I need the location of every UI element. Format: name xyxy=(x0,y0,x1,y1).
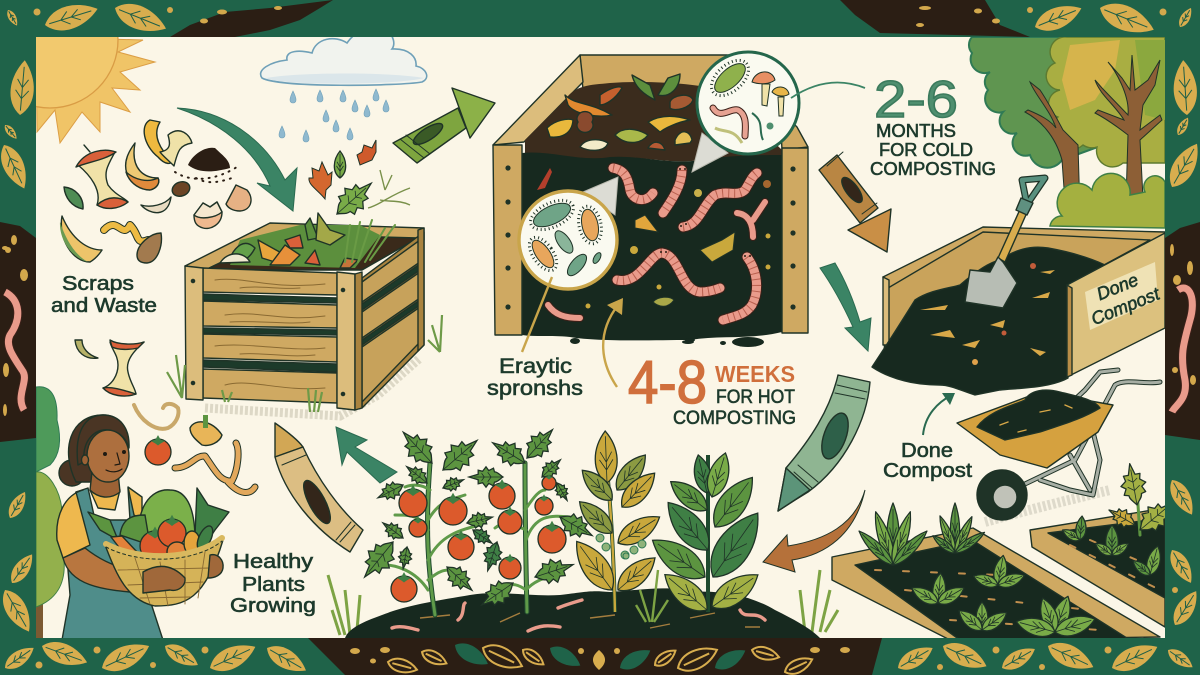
soil band: bottom xyxy=(308,638,882,675)
soil patch: left xyxy=(0,222,36,442)
small grass on mound xyxy=(636,570,668,622)
magnifier: upper microbes xyxy=(692,52,799,172)
worms xyxy=(548,168,765,320)
arrow: teal back to bin xyxy=(336,427,397,483)
callout: hot composting duration: FOR HOT xyxy=(716,387,795,408)
wooden sign panel xyxy=(1067,233,1165,377)
front panel slats xyxy=(203,268,337,295)
icon: egg shells xyxy=(194,185,251,228)
icon: second apple core xyxy=(103,340,144,396)
spiky plants xyxy=(855,503,987,569)
leaves in soil band xyxy=(350,638,850,675)
ground shadow: crate xyxy=(205,358,420,416)
seedlings: front bed xyxy=(909,554,1098,640)
person holding harvest basket xyxy=(57,415,229,640)
callout: hot composting duration: WEEKS xyxy=(715,361,795,387)
face xyxy=(87,430,129,482)
soil patch: right xyxy=(1165,222,1200,440)
soil patch: top left xyxy=(170,0,333,37)
arrow: green crayon xyxy=(393,88,495,163)
trees: lower left xyxy=(36,387,64,640)
icon: small leaf xyxy=(64,187,83,209)
icon: sun xyxy=(0,0,155,143)
raised garden bed: back xyxy=(1030,461,1180,627)
magnifier: lower microbes xyxy=(519,177,618,289)
wheelbarrow xyxy=(957,370,1160,520)
gold leaves: top xyxy=(5,0,1195,41)
compost heap xyxy=(872,247,1105,395)
soil patch: top right xyxy=(840,0,1030,37)
facial features xyxy=(104,451,125,472)
lettuce and greens xyxy=(139,490,195,540)
callout: cold composting duration: 2-6 xyxy=(874,71,958,129)
produce xyxy=(111,536,138,555)
ground shadow: wheelbarrow xyxy=(985,490,1110,522)
small debris in compost xyxy=(537,168,771,308)
label: done compost sign xyxy=(1080,264,1163,329)
trees: upper right xyxy=(969,37,1165,228)
dark compost body xyxy=(522,153,782,340)
back boards xyxy=(580,55,735,90)
label: healthy plants growing: Growing xyxy=(230,595,316,617)
icon: orange piece xyxy=(190,415,222,445)
label: done compost with arrow xyxy=(883,393,972,482)
arrow: brown crayon xyxy=(819,152,891,252)
leaves falling into bin xyxy=(309,140,410,224)
icon: apple core xyxy=(76,145,128,208)
panel: compost cross-section bin xyxy=(493,55,808,347)
arrow: brown curve to garden xyxy=(763,490,865,572)
label: healthy plants growing: Healthy xyxy=(233,551,313,573)
overalls xyxy=(62,488,163,640)
callout: hot composting duration: 4-8 xyxy=(628,349,707,416)
grass beside mound xyxy=(328,570,838,635)
brown top layer xyxy=(525,82,782,161)
garden mound with soil xyxy=(345,588,820,638)
icon: yellow peel and core xyxy=(144,120,192,166)
back rim xyxy=(185,223,424,270)
shovel xyxy=(965,178,1045,308)
callout: hot composting duration xyxy=(603,298,796,429)
finished compost bin xyxy=(872,178,1165,395)
icon: soil heap xyxy=(175,148,240,182)
label: done compost sign: Compost xyxy=(1088,283,1163,329)
scraps and waste pile xyxy=(60,120,255,492)
bush xyxy=(1050,173,1165,228)
plant: tomato two xyxy=(469,422,598,614)
icon: coffee bean xyxy=(170,179,192,199)
bin contents: greens and scraps xyxy=(220,213,395,268)
border worms xyxy=(5,288,1192,412)
callout: cold composting duration: FOR COLD xyxy=(879,140,973,160)
arrow: teal into bin xyxy=(177,108,297,211)
gold leaves: bottom xyxy=(1,587,1196,675)
plant: yellow-leaf plant xyxy=(567,431,665,612)
scraps in top layer xyxy=(547,74,693,150)
trunks xyxy=(1025,82,1080,217)
callout: microbes label with leader: spronshs xyxy=(487,377,583,400)
icon: slice xyxy=(75,340,98,358)
hair fringe xyxy=(77,415,129,465)
grass tufts around bin xyxy=(167,315,442,412)
icon: melon slice xyxy=(60,216,102,262)
icon: rain cloud xyxy=(261,27,427,142)
label: done compost with arrow: Compost xyxy=(883,460,972,482)
callout line: cold composting xyxy=(791,83,865,98)
raised garden bed: front xyxy=(832,503,1160,640)
icon: curled peels xyxy=(134,404,179,429)
label: done compost with arrow: Done xyxy=(901,440,953,462)
label: scraps and waste: and Waste xyxy=(51,295,157,317)
tree canopy dark xyxy=(969,37,1095,168)
icon: shell piece xyxy=(141,197,171,213)
arrow: green crayon down xyxy=(778,375,870,511)
plant: leafy green plant xyxy=(645,450,771,619)
icon: peel ribbon xyxy=(104,225,148,241)
neck xyxy=(90,472,120,497)
icon: long peel xyxy=(175,443,255,492)
plant: tomato one xyxy=(354,424,496,615)
tree canopy yellow-green xyxy=(1046,37,1165,167)
soil crumbs below bin xyxy=(570,337,764,347)
hair back and bun xyxy=(59,460,85,486)
side panel slats xyxy=(362,232,424,408)
label: done compost sign: Done xyxy=(1094,270,1141,304)
arrow: tan crayon xyxy=(275,423,363,552)
corner posts xyxy=(185,266,203,400)
callout: microbes label with leader xyxy=(487,277,583,400)
icon: tomato xyxy=(145,435,171,465)
wooden posts xyxy=(493,145,522,335)
icon: peel crescent xyxy=(126,143,159,190)
basket xyxy=(105,540,223,606)
callout: cold composting duration: MONTHS xyxy=(876,121,956,141)
label: healthy plants growing: Plants xyxy=(242,574,305,596)
callout: microbes label with leader: Eraytic xyxy=(499,355,572,378)
arrow: teal to finished compost xyxy=(820,263,871,351)
gold flecks on side soil xyxy=(2,235,1196,416)
hands xyxy=(143,566,185,593)
icon: nut xyxy=(137,233,161,263)
callout: cold composting duration: COMPOSTING xyxy=(870,159,996,179)
callout: cold composting duration xyxy=(870,71,996,179)
label: scraps and waste: Scraps xyxy=(62,273,134,295)
ear xyxy=(82,455,88,465)
label: healthy plants growing xyxy=(230,551,316,617)
arm xyxy=(63,548,145,593)
compost bin: wooden crate xyxy=(185,213,424,410)
label: scraps and waste xyxy=(51,273,157,317)
shirt xyxy=(57,487,142,558)
seedlings: back bed xyxy=(1061,461,1180,579)
callout: hot composting duration: COMPOSTING xyxy=(673,408,796,429)
